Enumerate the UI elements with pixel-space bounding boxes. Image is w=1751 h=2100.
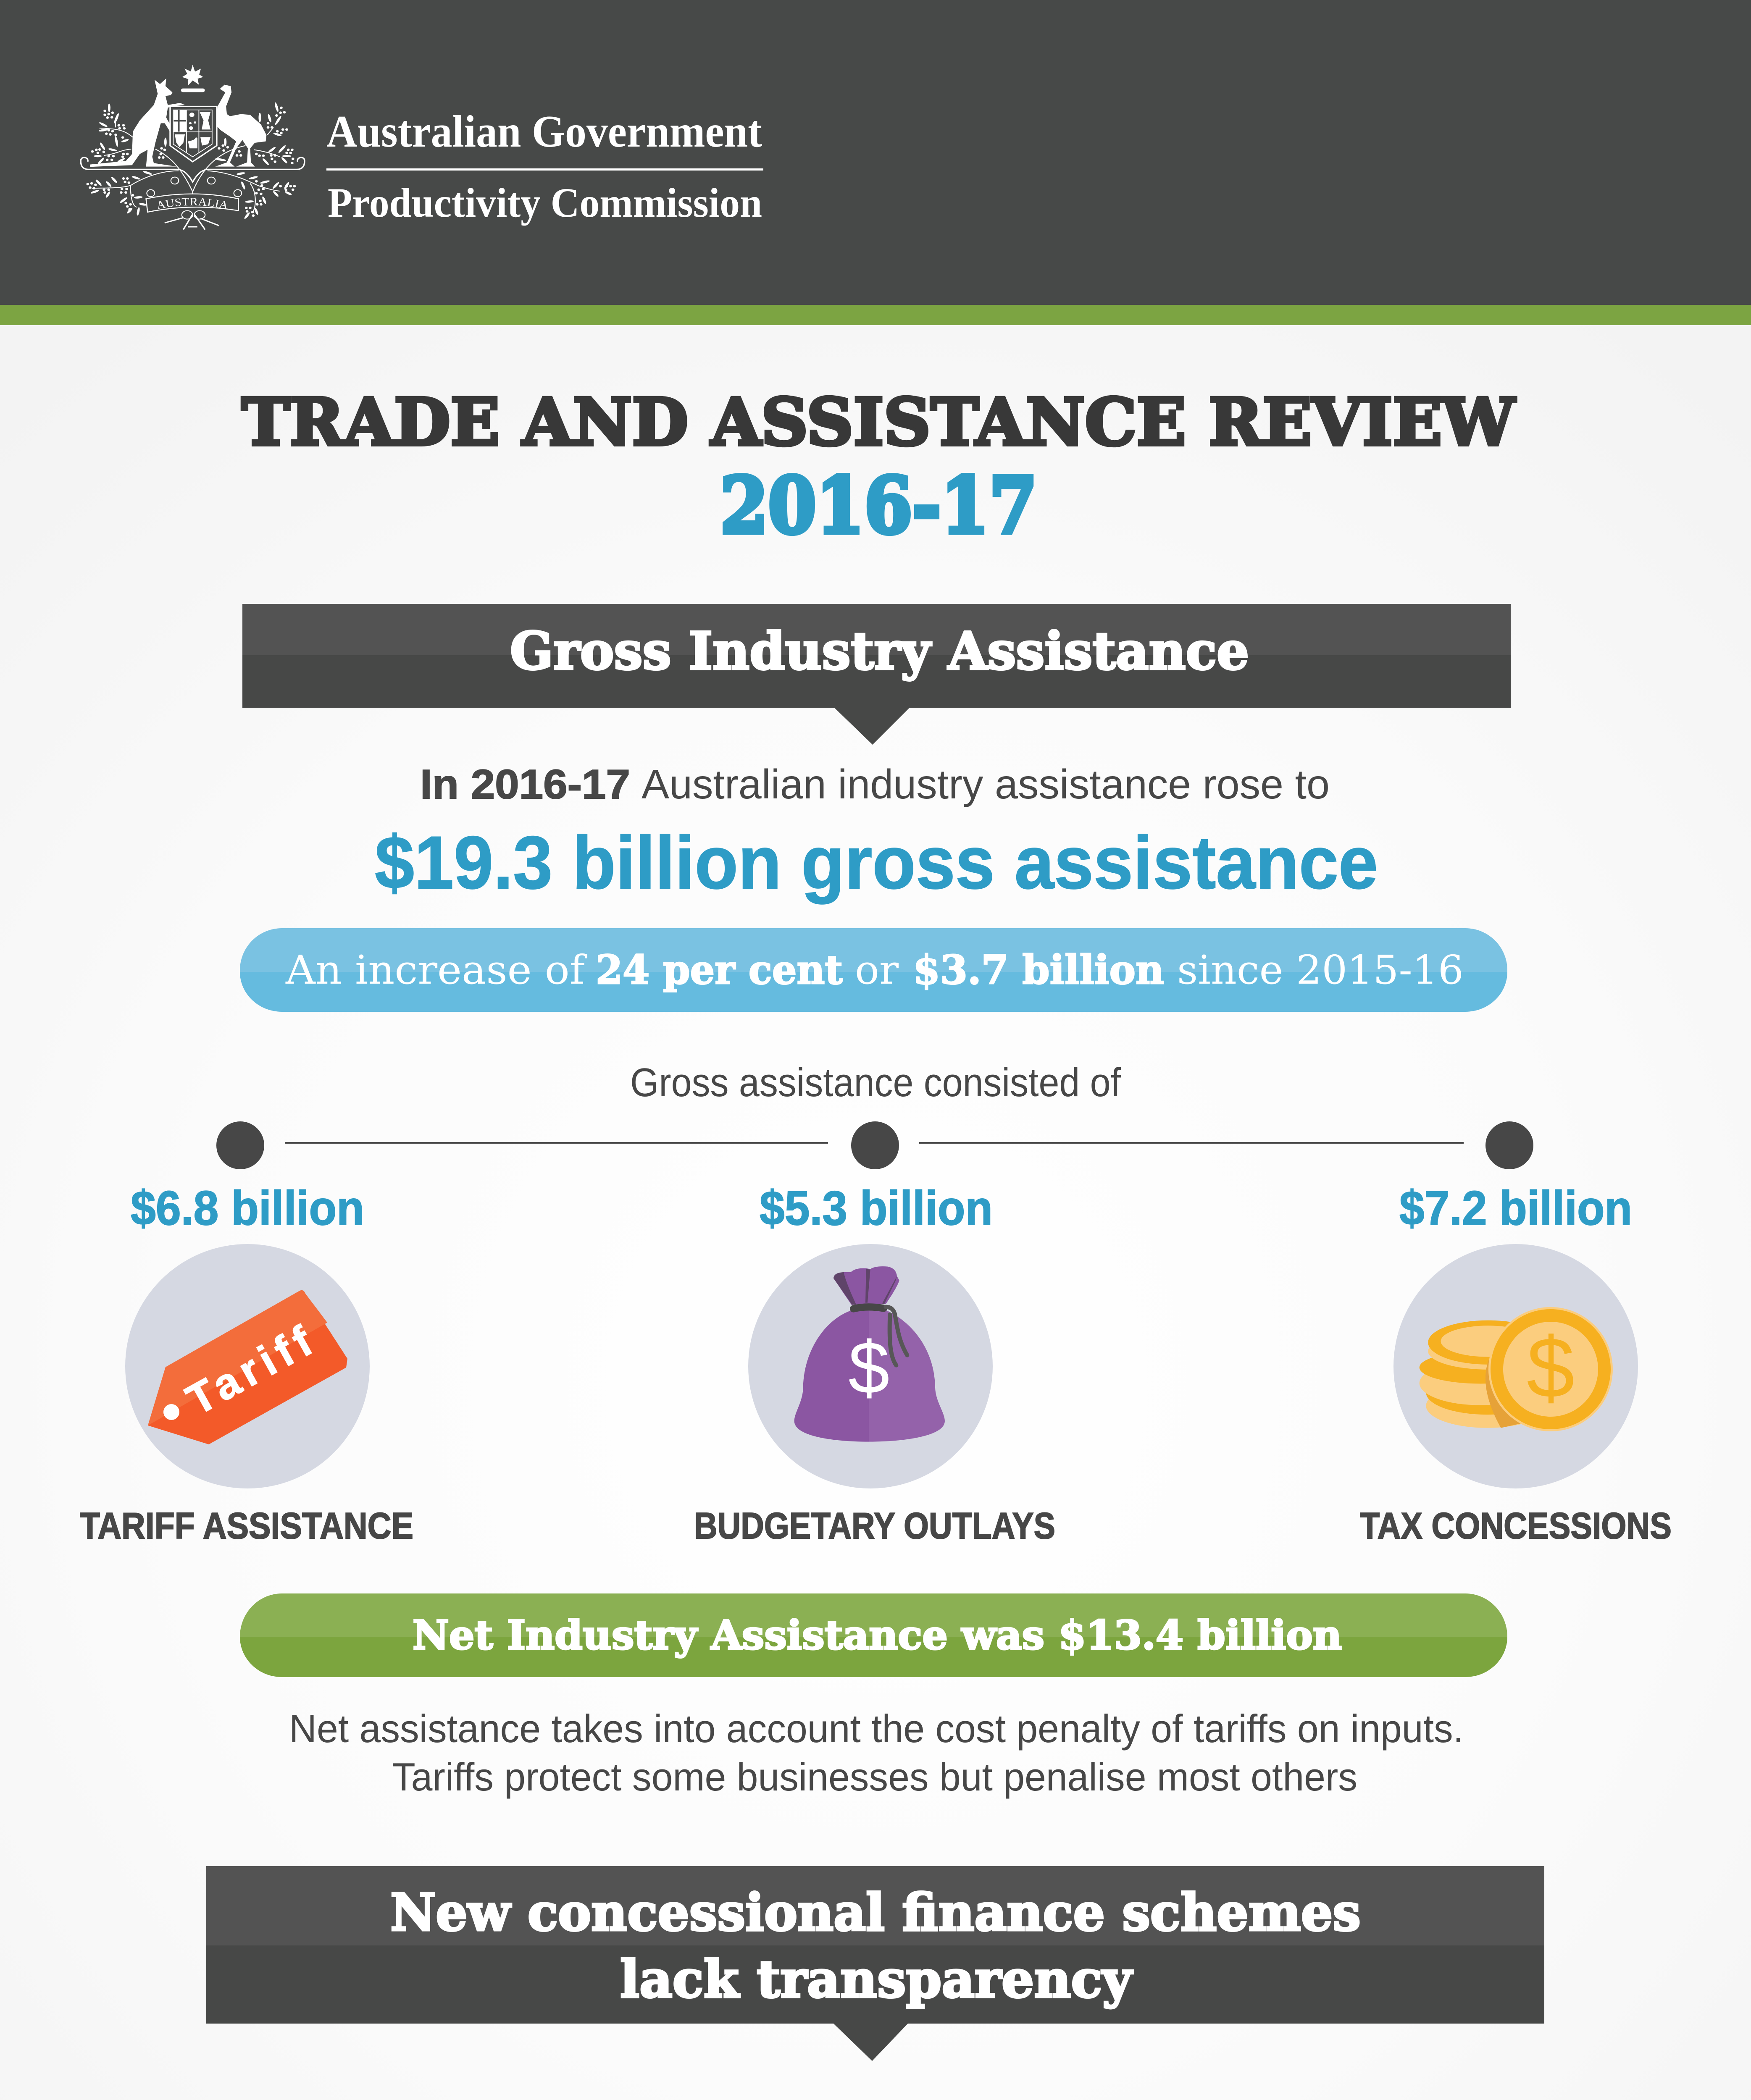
callout: increase pill: An increase of <box>285 947 587 993</box>
callout: increase pill: $3.7 billion <box>913 947 1164 993</box>
icon: money bag <box>748 1244 993 1488</box>
header band <box>0 0 1751 325</box>
panel: tax concessions <box>1360 1181 1672 1546</box>
callout: increase pill <box>240 928 1507 1012</box>
label: TAX CONCESSIONS <box>1360 1505 1672 1546</box>
banner: Gross Industry Assistance <box>242 604 1511 745</box>
logo text: Australian Government: Australian Government <box>326 107 762 157</box>
amount: $5.3 billion <box>760 1181 993 1235</box>
icon: Australian coat of arms <box>81 65 305 230</box>
heading: New concessional finance schemes <box>390 1882 1361 1942</box>
icon: tariff tag: Tariff <box>179 1317 320 1424</box>
banner: new concessional finance schemes <box>206 1866 1544 2061</box>
callout: increase pill: or <box>855 947 899 993</box>
label: BUDGETARY OUTLAYS <box>694 1505 1055 1546</box>
text: gross assistance consisted of: Gross assistance consisted of <box>630 1060 1121 1105</box>
banner: new concessional finance schemes: lack transparency <box>620 1949 1133 2009</box>
icon: coins: $ <box>1527 1320 1575 1416</box>
text block: net assistance explanation: Tariffs protect some businesses but penalise most others <box>392 1755 1357 1799</box>
icon: Australian coat of arms: AUSTRALIA <box>155 196 230 212</box>
icon: coins <box>1393 1244 1638 1488</box>
panel: budgetary outlays <box>694 1181 1055 1546</box>
intro sentence: In 2016-17 <box>420 761 630 807</box>
amount: $7.2 billion <box>1399 1181 1632 1235</box>
timeline connector <box>216 1121 1533 1169</box>
heading: Gross Industry Assistance <box>510 621 1249 682</box>
title: TRADE AND ASSISTANCE REVIEW <box>242 384 1516 460</box>
icon: money bag: $ <box>848 1326 889 1409</box>
callout: increase pill: since 2015-16 <box>1177 947 1464 993</box>
subtitle year: 2016-17 <box>720 460 1037 551</box>
panel: tariff assistance <box>80 1181 413 1546</box>
headline figure: $19.3 billion gross assistance <box>375 821 1378 904</box>
icon: tariff tag <box>125 1244 370 1488</box>
logo divider <box>326 168 763 171</box>
text block: net assistance explanation <box>289 1706 1464 1799</box>
callout: increase pill: 24 per cent <box>596 947 843 993</box>
callout: net assistance pill <box>240 1593 1507 1677</box>
logo text: Productivity Commission: Productivity Commission <box>328 179 762 226</box>
label: TARIFF ASSISTANCE <box>80 1505 413 1546</box>
amount: $6.8 billion <box>131 1181 364 1235</box>
callout: net assistance pill: Net Industry Assistance was $13.4 billion <box>413 1612 1342 1659</box>
intro sentence: Australian industry assistance rose to <box>642 761 1330 807</box>
text block: net assistance explanation: Net assistance takes into account the cost penalty of tariffs on inputs. <box>289 1706 1464 1751</box>
